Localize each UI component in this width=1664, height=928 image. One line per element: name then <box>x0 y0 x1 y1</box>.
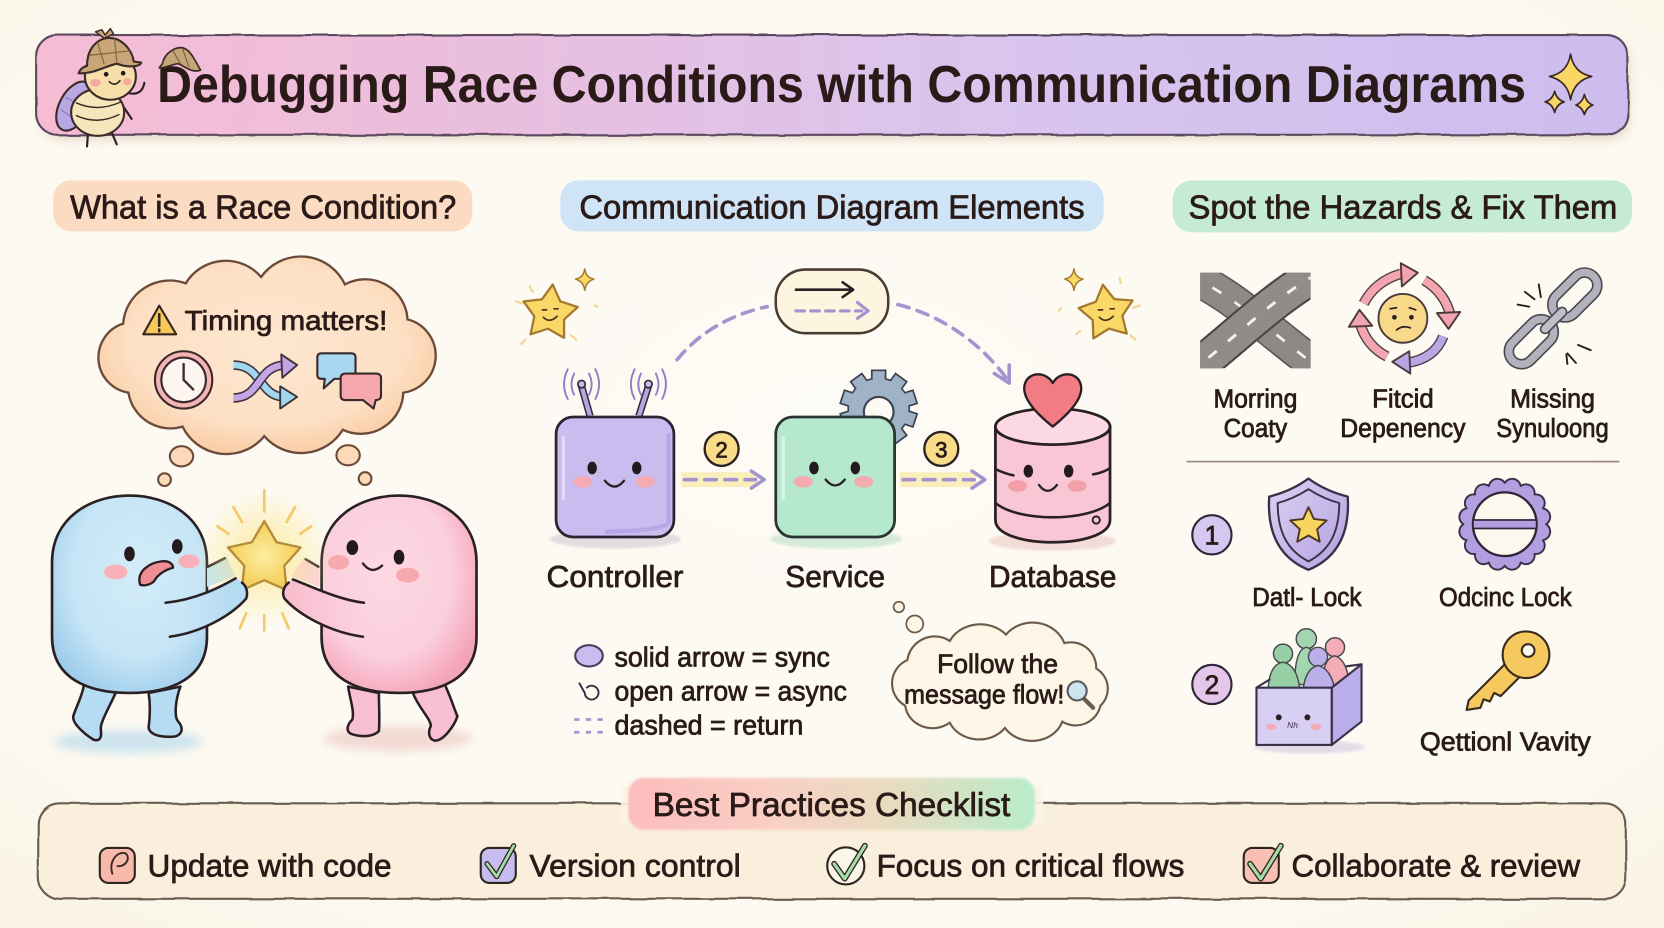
fix label: data lock: Datl- Lock <box>1252 584 1362 612</box>
message legend pill <box>776 270 888 333</box>
heading: Spot the Hazards & Fix Them: Spot the Hazards & Fix Them <box>1189 189 1617 226</box>
fix icon: shield <box>1269 479 1348 570</box>
hazard icon: broken chain <box>1504 267 1603 369</box>
panel background <box>38 803 1626 899</box>
hazard icon: circular dependency <box>1349 263 1460 374</box>
banner ribbon <box>36 35 1628 135</box>
icon: contested star with sparkle <box>196 490 332 630</box>
body <box>52 496 207 693</box>
label: Controller: Controller <box>547 559 683 594</box>
body <box>322 496 477 693</box>
node: controller <box>550 369 681 549</box>
callout: follow the message flow: message flow! <box>904 680 1064 710</box>
hazard label: merging: Coaty <box>1224 415 1287 443</box>
blue character front arm <box>165 578 247 637</box>
item: focus on critical flows: Focus on critical flows <box>877 848 1184 884</box>
illustration: blue character <box>52 496 236 753</box>
panel: best practices checklist <box>38 778 1626 899</box>
heading: What is a Race Condition?: What is a Race Condition? <box>70 189 456 226</box>
heading: Communication Diagram Elements <box>560 180 1104 231</box>
heading: best practices: Best Practices Checklist <box>653 786 1010 823</box>
cloud shape <box>98 257 436 454</box>
heading: Spot the Hazards & Fix Them <box>1173 180 1632 232</box>
icon: open swatch <box>579 683 599 700</box>
hazard label: merging <box>1213 385 1297 443</box>
hazard label: dependency: Fitcid <box>1372 385 1434 413</box>
icon: detective bug mascot <box>49 29 144 146</box>
pink character front arm <box>283 579 366 637</box>
text: callout: Follow the <box>937 649 1058 679</box>
fix icon: box of people <box>1254 629 1365 753</box>
icon: chat bubbles <box>317 353 381 409</box>
arrow: service to database, step 3 <box>900 432 985 488</box>
label: Database: Database <box>989 559 1116 594</box>
heading: best practices <box>621 778 1043 830</box>
legend <box>574 641 847 740</box>
arrow: dashed arc right <box>898 305 1009 383</box>
badge: fix 2 <box>1192 665 1232 704</box>
arrow: dashed arc left <box>677 307 767 360</box>
icon: left smiling star <box>516 268 597 344</box>
text: dashed: dashed = return <box>614 709 803 740</box>
badge: fix 1 <box>1192 515 1232 554</box>
arrow: service to database, step 3: 3 <box>935 437 947 462</box>
item: collaborate and review: Collaborate & review <box>1291 848 1581 884</box>
face <box>104 539 200 585</box>
text: open arrow: open arrow = async <box>614 675 847 706</box>
fix label: ordinal lock: Odcinc Lock <box>1439 584 1572 612</box>
icon: solid swatch <box>575 645 603 666</box>
title banner <box>36 35 1630 140</box>
illustration: pink character <box>291 496 477 751</box>
hazard icon: merging roads <box>1200 272 1311 368</box>
legs <box>348 684 457 741</box>
hazard label: missing sync: Synuloong <box>1496 415 1609 443</box>
hazard label: dependency: Depenency <box>1340 415 1466 443</box>
hazard label: missing sync: Missing <box>1510 385 1595 413</box>
icon: magnifier <box>1068 681 1093 708</box>
arrow: controller to service, step 2: 2 <box>715 437 728 462</box>
fix label: optional validity: Qettionl Vavity <box>1420 728 1591 756</box>
heading: What is a Race Condition? <box>53 180 472 231</box>
item: version control: Version control <box>530 848 741 884</box>
icon: sparkles <box>1545 54 1593 115</box>
thought bubbles <box>158 445 371 486</box>
icon: small detective hat <box>159 48 201 71</box>
label: Service: Service <box>785 559 885 594</box>
icon: gear <box>840 370 917 447</box>
icon: heart <box>1024 374 1081 427</box>
fix icon: key <box>1467 631 1549 710</box>
icon: shuffle arrows <box>233 354 297 409</box>
text: solid arrow: solid arrow = sync <box>614 641 830 672</box>
title text: Debugging Race Conditions with Communication Diagrams <box>157 56 1526 114</box>
icon: warning triangle <box>143 306 176 334</box>
hazard label: missing sync <box>1496 385 1609 443</box>
icon: right smiling star <box>1059 268 1140 340</box>
hazard label: merging: Morring <box>1213 385 1297 413</box>
icon: clock <box>155 351 212 409</box>
badge: fix 2: 2 <box>1205 670 1219 700</box>
item: update with code: Update with code <box>148 848 392 884</box>
antennas <box>564 369 666 416</box>
legs <box>73 684 182 740</box>
back arm <box>207 558 236 587</box>
node: database <box>989 374 1116 551</box>
arrow: controller to service, step 2 <box>681 432 764 488</box>
hazard label: dependency <box>1340 385 1466 443</box>
box scribble text: Nh <box>1287 720 1298 730</box>
node: service <box>770 370 917 549</box>
heading: Communication Diagram Elements: Communication Diagram Elements <box>579 189 1085 226</box>
face <box>328 540 419 583</box>
badge: fix 1: 1 <box>1205 520 1219 550</box>
callout: follow the message flow <box>892 602 1108 741</box>
fix icon: seal <box>1459 479 1550 570</box>
panel: thought cloud timing matters <box>98 257 436 486</box>
icon: dashed swatch <box>574 719 605 732</box>
back arm <box>291 558 319 587</box>
text: timing matters: Timing matters! <box>185 305 387 336</box>
